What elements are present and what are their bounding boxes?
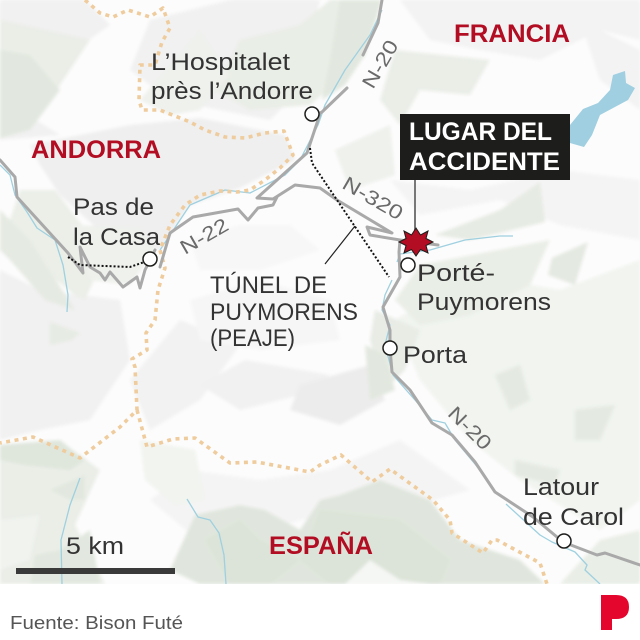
label: Porté-Puymorens: Porté- (417, 260, 495, 287)
town marker: Latour de Carol (557, 534, 571, 548)
icon: accident star (399, 228, 433, 256)
label: L'Hospitalet près l'Andorre: L’Hospitalet (151, 49, 290, 76)
country label: Francia: FRANCIA (454, 20, 570, 48)
border: dashed frontier (0, 0, 547, 584)
label: Latour de Carol: de Carol (523, 504, 624, 531)
callout: accident site: ACCIDENTE (409, 148, 560, 176)
label: Porta: Porta (403, 342, 468, 369)
country label: España: ESPAÑA (269, 530, 373, 560)
label: L'Hospitalet près l'Andorre: près l’Andorre (151, 78, 313, 105)
label: Pas de la Casa (74, 198, 160, 245)
label: Latour de Carol: Latour (523, 474, 599, 501)
label: Túnel de Puymorens: TÚNEL DE (210, 272, 327, 299)
logo (601, 595, 629, 630)
label: Túnel de Puymorens (210, 272, 358, 352)
town marker: Porté-Puymorens (401, 258, 415, 272)
scale bar (16, 533, 175, 574)
label: Latour de Carol (524, 478, 622, 525)
road label: N-320: N-320 (338, 173, 407, 225)
label: L'Hospitalet près l'Andorre (151, 49, 313, 105)
label: Pas de la Casa: Pas de (73, 194, 154, 221)
town marker: Pas de la Casa (143, 252, 157, 266)
leader line: tunnel label (325, 226, 355, 264)
road label: N-20 south: N-20 (443, 403, 495, 455)
road label: N-20 north: N-20 (358, 36, 403, 93)
town marker: L'Hospitalet (305, 107, 319, 121)
lake (570, 71, 635, 147)
callout leader line (414, 180, 416, 230)
scale bar: 5 km (66, 533, 124, 560)
label: Porté-Puymorens: Puymorens (417, 289, 551, 316)
source: Fuente: Bison Futé (10, 612, 183, 633)
label: Túnel de Puymorens: PUYMORENS (210, 299, 358, 326)
label: Túnel de Puymorens: (PEAJE) (210, 325, 295, 352)
road label: N-22: N-22 (176, 214, 233, 259)
pale green (395, 260, 640, 530)
callout: accident site: LUGAR DEL (409, 118, 552, 146)
country label: Andorra: ANDORRA (31, 136, 161, 164)
town marker: Porta (383, 341, 397, 355)
callout: accident site (400, 114, 570, 180)
label: Porté-Puymorens (417, 260, 551, 316)
label: Pas de la Casa: la Casa (73, 224, 161, 251)
tunnel: dotted line (68, 148, 389, 277)
